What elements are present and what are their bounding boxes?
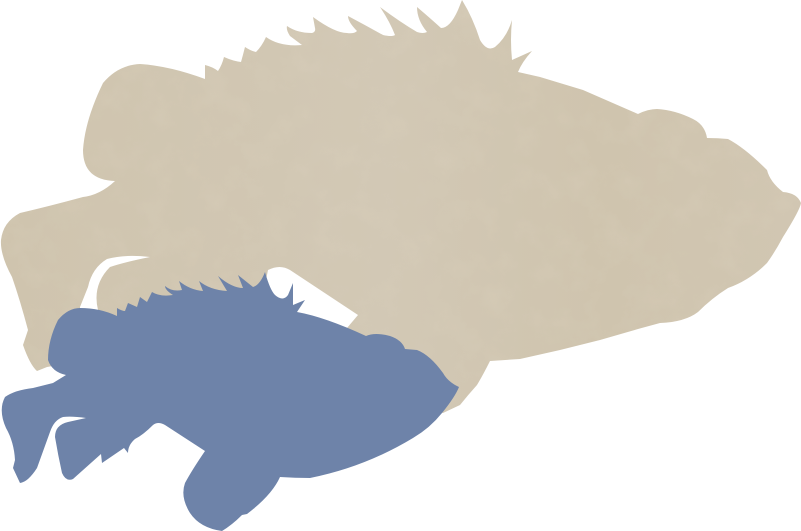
small blue fish silhouette <box>2 272 459 531</box>
large tan fish silhouette <box>1 0 801 413</box>
tail fin gap in tan fish <box>80 256 150 320</box>
